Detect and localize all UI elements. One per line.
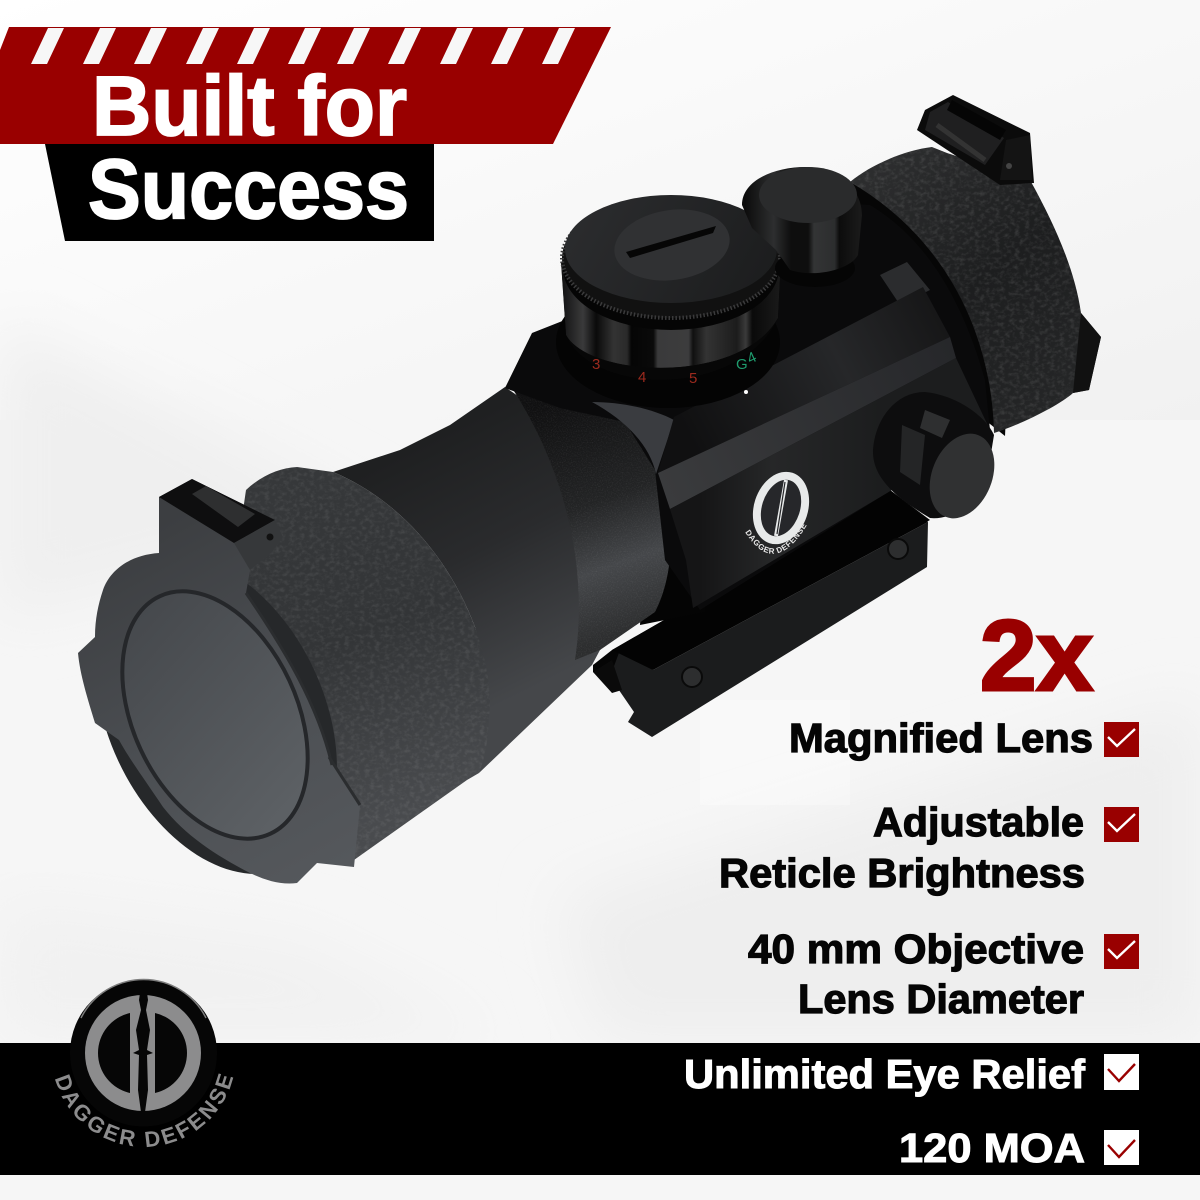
small turret knob (742, 167, 862, 287)
hinge (159, 479, 275, 543)
feature: Adjustable Reticle Brightness: Reticle Brightness (719, 850, 1085, 896)
rail mount (593, 490, 930, 737)
body logo: Dagger Defense (745, 472, 810, 554)
lens disc (85, 562, 345, 868)
feature: Unlimited Eye Relief: Unlimited Eye Relief (684, 1051, 1085, 1097)
dial top (565, 195, 777, 303)
chamfer facet (658, 337, 956, 509)
knurled edge (562, 198, 780, 318)
black body collar (640, 450, 705, 625)
dial numbers (592, 349, 759, 387)
rear body underlay (850, 182, 1010, 436)
body logo: Dagger Defense: DAGGER DEFENSE (745, 524, 807, 554)
scope body top plate (505, 200, 990, 610)
logo side face (670, 358, 990, 608)
hazard stripes (31, 28, 575, 64)
dial numbers: 4 (638, 369, 646, 386)
large turret dial (556, 195, 781, 408)
brand logo: Dagger Defense: DAGGER DEFENSE (55, 1074, 234, 1148)
brand logo: Dagger Defense (55, 978, 234, 1148)
rail screws (682, 667, 702, 687)
feature: 40 mm Objective Lens Diameter: 40 mm Objective (748, 926, 1084, 972)
front cap rim (47, 517, 385, 913)
2x magnification callout: 2x (980, 600, 1093, 712)
rear flip tab (917, 95, 1034, 185)
check icon (1104, 722, 1139, 757)
check icon (1104, 934, 1139, 969)
knob end cap (918, 424, 1006, 528)
heading line 1: Built for (92, 59, 407, 153)
cap slot (626, 226, 716, 258)
check icon (1104, 807, 1139, 842)
feature: 40 mm Objective Lens Diameter (748, 926, 1139, 1022)
rear rubber hood (850, 147, 1101, 433)
dial numbers: 5 (689, 370, 697, 387)
dial numbers: 3 (592, 356, 600, 373)
logo caption (745, 500, 820, 554)
dial numbers: G (736, 356, 748, 373)
feature: 120 MOA: 120 MOA (899, 1125, 1085, 1171)
ribbed skirt (561, 258, 781, 368)
feature: 40 mm Objective Lens Diameter: Lens Diameter (798, 976, 1084, 1022)
objective tube (333, 387, 640, 773)
feature: Adjustable Reticle Brightness (719, 799, 1139, 896)
header banner: Built for Success (0, 27, 611, 241)
check icon (1104, 1130, 1139, 1165)
red banner (0, 27, 611, 144)
knob top (759, 167, 857, 223)
front rubber sleeve (230, 467, 490, 860)
feature: Magnified Lens: Magnified Lens (789, 715, 1093, 761)
logo wordmark (55, 1074, 234, 1147)
front flip cap (78, 479, 360, 883)
check icon (1104, 1054, 1139, 1090)
DD monogram (85, 995, 201, 1111)
bottom black bar (0, 1043, 1200, 1175)
textured tube section (505, 385, 671, 660)
black banner (45, 144, 434, 241)
product: red dot scope (78, 95, 1101, 884)
indicator dot (744, 390, 748, 394)
battery cap (610, 202, 734, 288)
logo ring (744, 464, 818, 552)
upper body facet (658, 287, 950, 473)
heading line 2: Success (88, 142, 409, 236)
dagger (133, 993, 153, 1127)
dial numbers: 4 (745, 349, 759, 368)
side windage knob (873, 392, 1006, 528)
logo disc (70, 980, 217, 1126)
feature: Adjustable Reticle Brightness: Adjustable (873, 799, 1084, 845)
